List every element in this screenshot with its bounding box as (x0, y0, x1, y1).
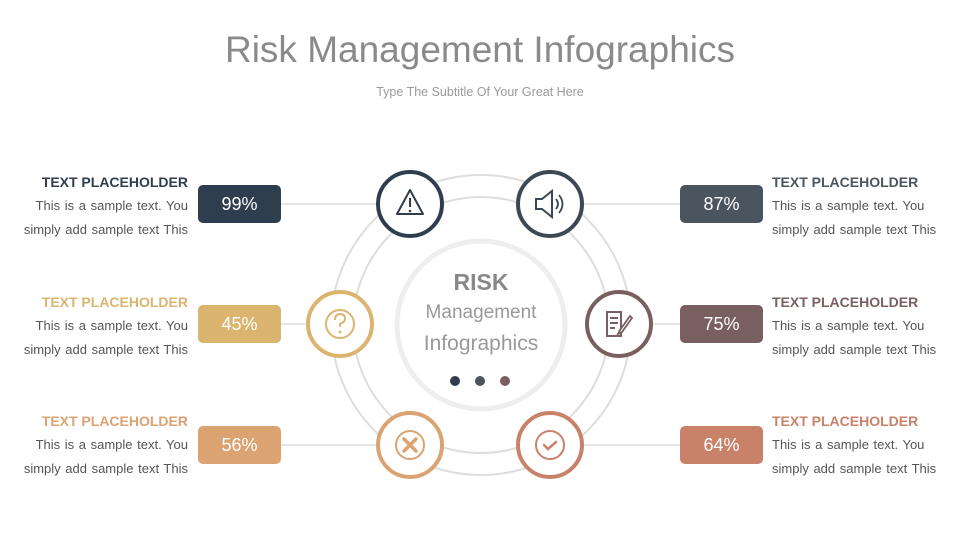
badge 64% (680, 426, 763, 464)
text block right 3: This is a sample text. You simply add sample text This (772, 437, 936, 476)
title: Risk Management Infographics (225, 29, 735, 70)
badge 45%: 45% (221, 314, 258, 334)
text block right 3 (772, 413, 936, 476)
center circle: Management (426, 302, 537, 323)
text block left 2 (24, 294, 188, 357)
text block right 1: TEXT PLACEHOLDER (772, 174, 918, 190)
center circle: RISK (454, 269, 509, 295)
text block left 3: TEXT PLACEHOLDER (42, 413, 188, 429)
icon: speaker (518, 172, 582, 236)
text block left 3: This is a sample text. You simply add sample text This (24, 437, 188, 476)
text block left 2: This is a sample text. You simply add sample text This (24, 318, 188, 357)
badge 45% (198, 305, 281, 343)
text block left 1: This is a sample text. You simply add sample text This (24, 198, 188, 237)
text block right 1 (772, 174, 936, 237)
center circle (397, 241, 565, 409)
text block right 3: TEXT PLACEHOLDER (772, 413, 918, 429)
text block left 3 (24, 413, 188, 476)
icon: question (308, 292, 372, 356)
badge 75% (680, 305, 763, 343)
subtitle: Type The Subtitle Of Your Great Here (376, 85, 584, 99)
text block left 1 (24, 174, 188, 237)
icon: document edit (587, 292, 651, 356)
text block right 1: This is a sample text. You simply add sample text This (772, 198, 936, 237)
text block right 2 (772, 294, 936, 357)
icon: warning (378, 172, 442, 236)
text block right 2: This is a sample text. You simply add sample text This (772, 318, 936, 357)
icon: check (518, 413, 582, 477)
text block left 1: TEXT PLACEHOLDER (42, 174, 188, 190)
badge 75%: 75% (703, 314, 740, 334)
badge 56% (198, 426, 281, 464)
badge 87%: 87% (703, 194, 740, 214)
text block left 2: TEXT PLACEHOLDER (42, 294, 188, 310)
badge 87% (680, 185, 763, 223)
badge 99%: 99% (221, 194, 258, 214)
icon: cross (378, 413, 442, 477)
text block right 2: TEXT PLACEHOLDER (772, 294, 918, 310)
center circle: Infographics (424, 332, 538, 355)
badge 56%: 56% (221, 435, 258, 455)
badge 64%: 64% (703, 435, 740, 455)
badge 99% (198, 185, 281, 223)
